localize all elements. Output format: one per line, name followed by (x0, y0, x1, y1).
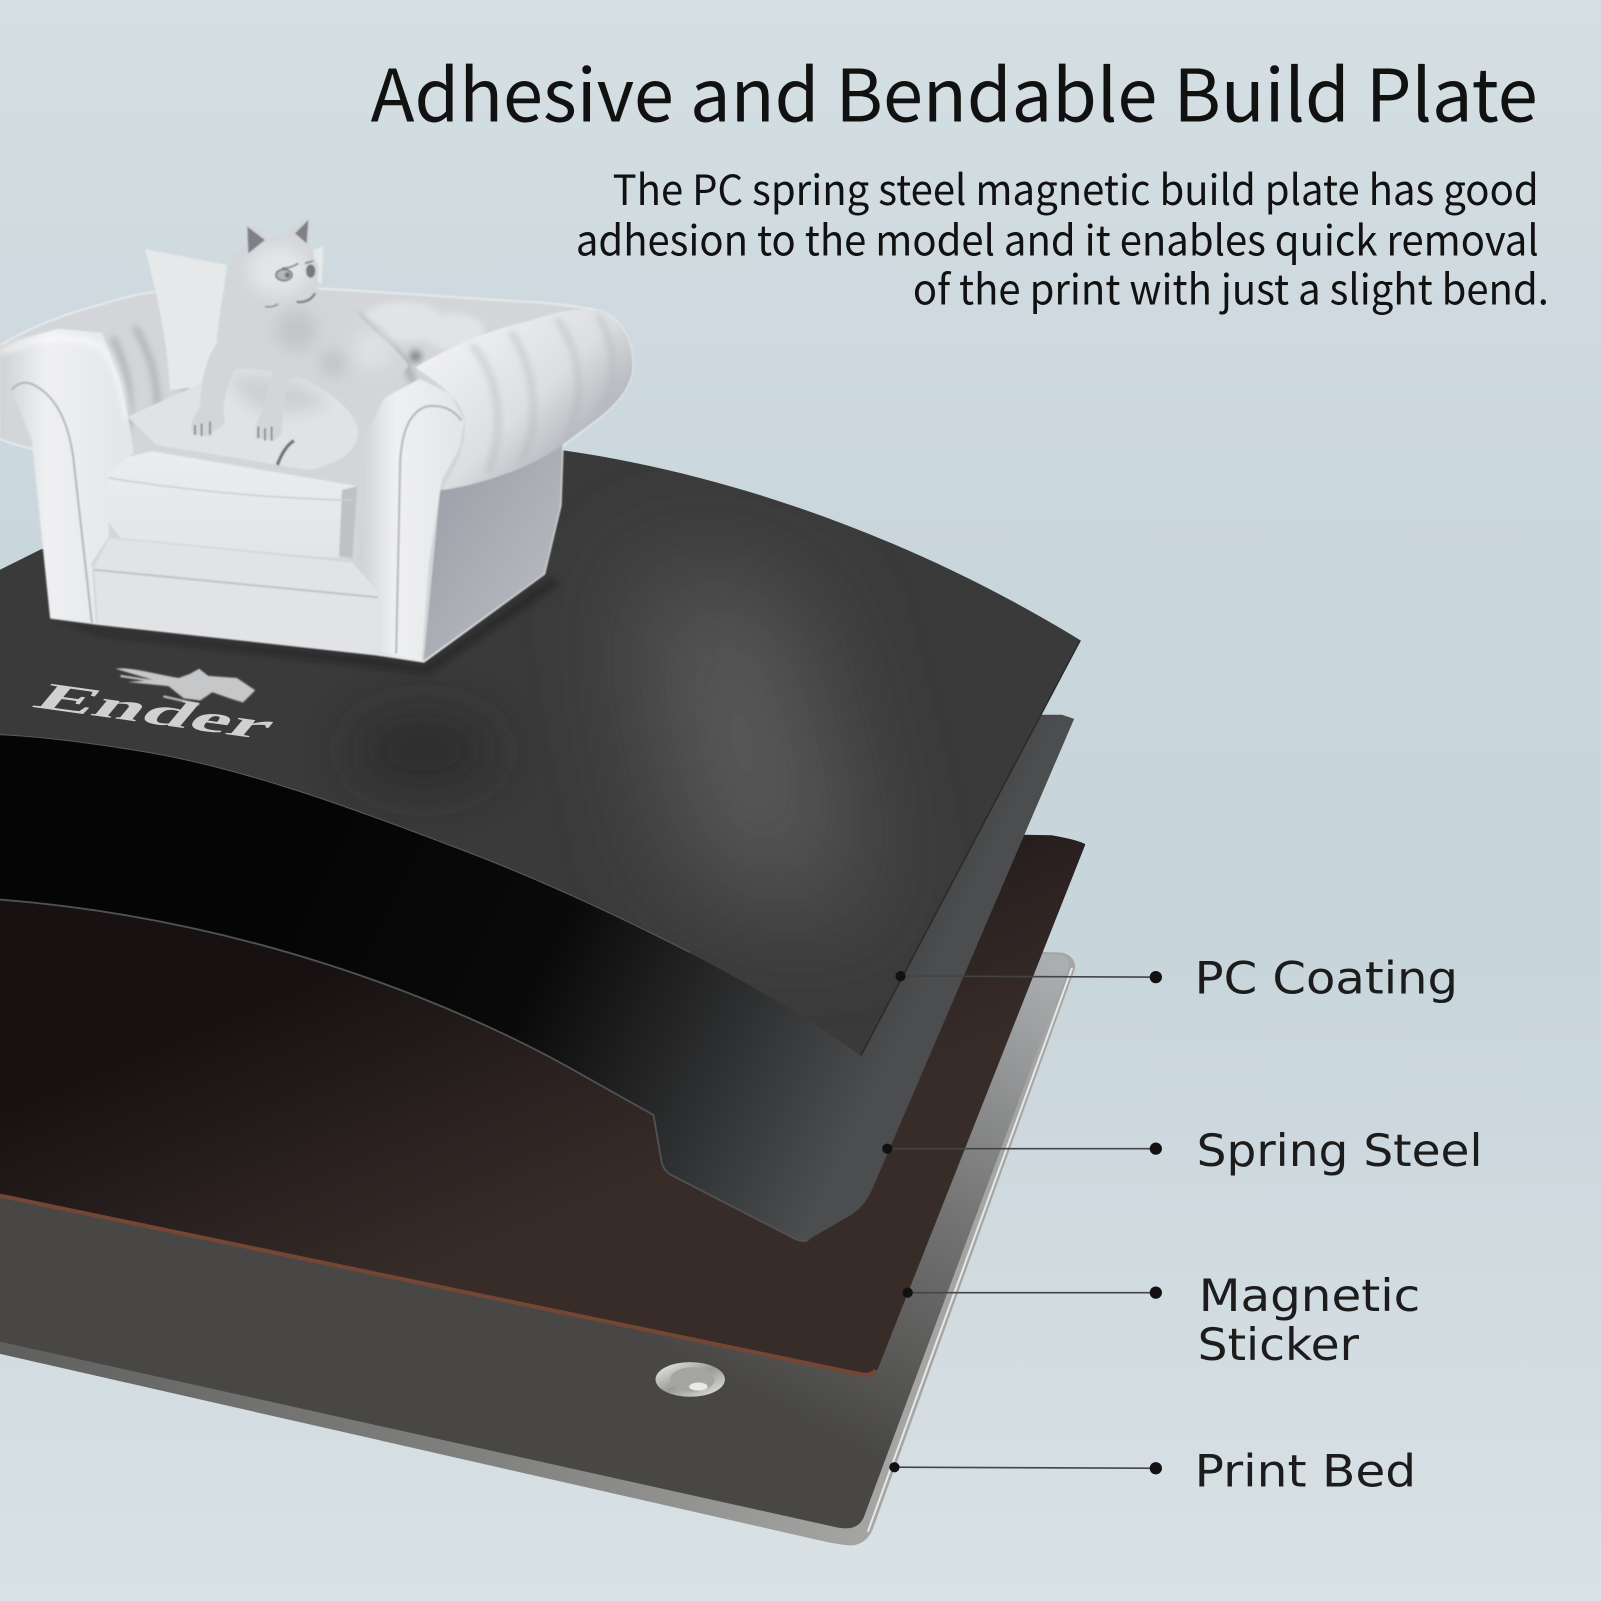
callout: Print Bed: Print Bed (1195, 1445, 1416, 1498)
callout: Magnetic Sticker: Sticker (1198, 1318, 1360, 1371)
cushions and cat, in zoomed local coordinates (128, 217, 408, 470)
callout: Magnetic Sticker: Magnetic (1199, 1269, 1420, 1322)
description: of the print with just a slight bend. (913, 256, 1549, 317)
chair: seat cushion (105, 451, 357, 559)
description (576, 157, 1549, 317)
cat: body (192, 217, 408, 442)
callout: PC Coating (895, 951, 1458, 1004)
description: adhesion to the model and it enables quick removal (576, 207, 1539, 268)
title: Adhesive and Bendable Build Plate (371, 38, 1538, 143)
cat: soft shading (248, 245, 393, 375)
cat: face (265, 261, 315, 307)
chair: tuft shading (112, 301, 485, 434)
layer: magnetic sticker (0, 817, 1085, 1376)
layer: spring steel (0, 715, 1074, 1241)
chair: right arm column (359, 379, 465, 661)
chair shadow on plate (51, 577, 560, 674)
layer: print bed (0, 919, 1075, 1545)
chair: side panel (424, 444, 563, 661)
logo: Ender: Ender (24, 676, 287, 747)
chair: front pillow (128, 369, 358, 470)
callout: Print Bed (889, 1445, 1416, 1498)
chair: back pillow (145, 249, 227, 390)
chair: base (94, 538, 380, 654)
cat: far ear (313, 247, 323, 285)
callout: Spring Steel: Spring Steel (1197, 1124, 1483, 1177)
chair and cat model (0, 217, 633, 662)
callout: Spring Steel (882, 1124, 1483, 1177)
cat figure (192, 217, 408, 442)
layer: PC coating (0, 450, 1080, 1056)
chair: left arm (0, 329, 134, 624)
callout: PC Coating: PC Coating (1195, 951, 1458, 1004)
chair: silhouette and tufted back (0, 289, 633, 662)
description: The PC spring steel magnetic build plate has good (613, 157, 1539, 218)
cat: paws (195, 422, 272, 441)
callout: Magnetic Sticker (903, 1269, 1420, 1371)
icon: countersunk screw hole (656, 1362, 725, 1397)
logo: dragon head (115, 668, 255, 705)
cat: ears inner (247, 220, 308, 253)
chair: right tufted roll (416, 309, 633, 490)
logo: Ender (24, 668, 287, 747)
